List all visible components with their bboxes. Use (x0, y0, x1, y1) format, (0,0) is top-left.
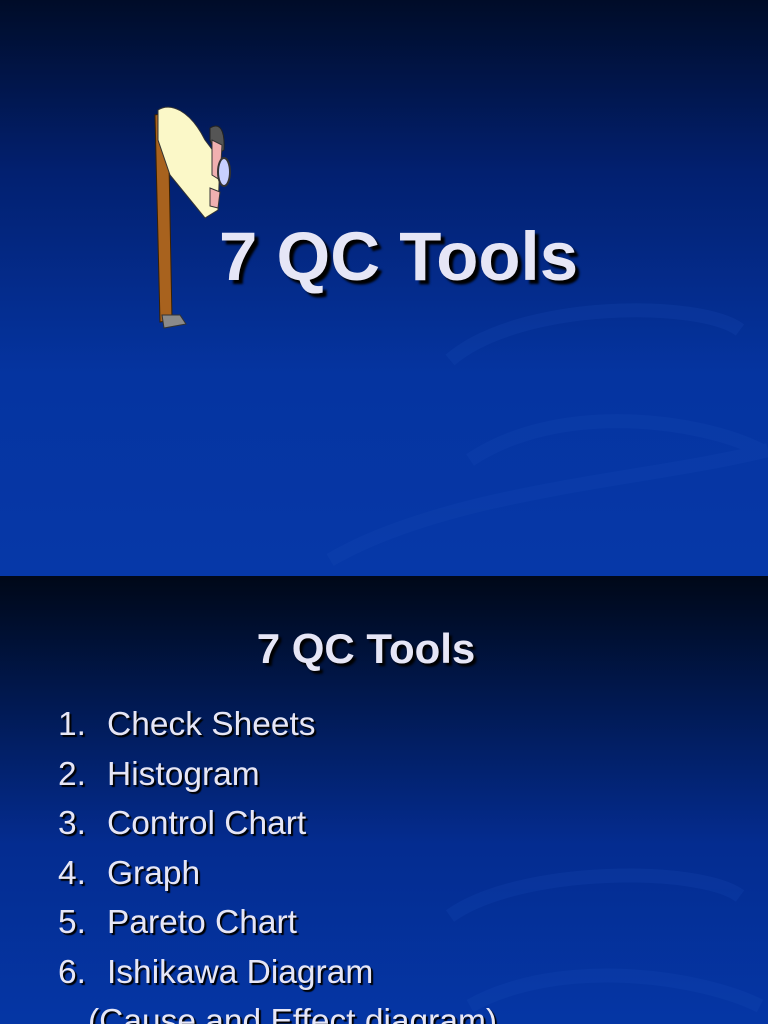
list of tools: Graph (107, 854, 200, 892)
list of tools: Ishikawa Diagram (107, 954, 373, 990)
list of tools: 4. (58, 854, 86, 892)
icon: detective with magnifying glass (154, 106, 231, 329)
title: 7 QC Tools (219, 218, 578, 295)
slide 1 background (0, 0, 768, 576)
list of tools: Pareto Chart (107, 904, 297, 941)
heading: 7 QC Tools (257, 625, 475, 672)
list of tools: Histogram (107, 756, 260, 792)
list of tools: 3. (58, 805, 86, 842)
list of tools: 5. (58, 904, 86, 941)
list of tools: Check Sheets (107, 706, 316, 743)
list of tools: 2. (58, 756, 86, 792)
list of tools: Control Chart (107, 805, 306, 842)
list of tools: 6. (58, 954, 86, 990)
list of tools (58, 706, 498, 1024)
slide 2 background (0, 576, 768, 1024)
list of tools: 1. (58, 706, 86, 743)
